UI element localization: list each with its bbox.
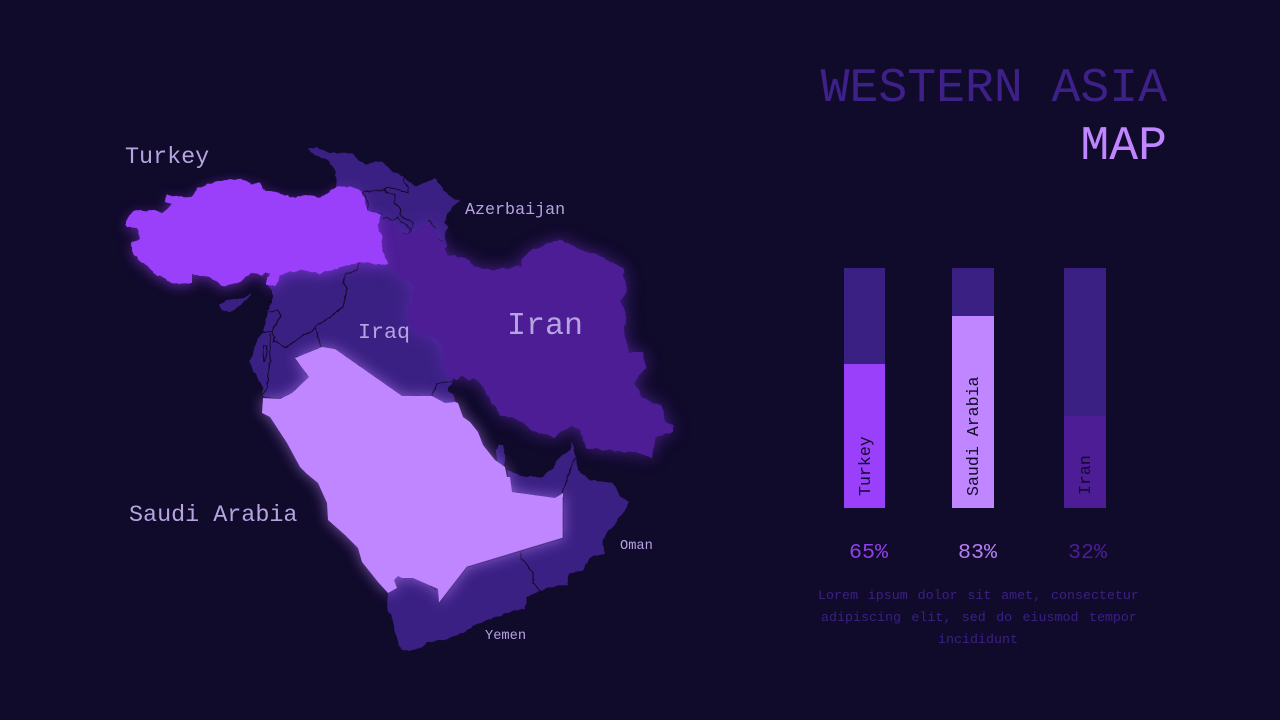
country: Georgia, Armenia, Azerbaijan <box>308 148 461 255</box>
value: Iran 32%: 32% <box>1068 540 1108 565</box>
title <box>821 62 1167 174</box>
body text <box>818 589 1139 648</box>
bar chart <box>844 268 1106 508</box>
title: WESTERN ASIA <box>821 62 1167 116</box>
bar: Saudi Arabia 83% <box>952 268 994 508</box>
body text: Lorem ipsum dolor sit amet, consectetur <box>818 589 1139 604</box>
label: Turkey: Turkey <box>125 145 209 171</box>
country: UAE and Qatar <box>496 440 576 498</box>
country: Turkey <box>127 179 388 286</box>
label: Azerbaijan: Azerbaijan <box>465 201 565 220</box>
bar: Turkey 65% <box>844 268 885 508</box>
country: Cyprus <box>219 293 252 312</box>
label: Iran: Iran <box>507 308 583 344</box>
country: Syria, Iraq, Jordan, Levant and Kuwait <box>250 250 456 405</box>
label: Iraq: Iraq <box>358 320 410 345</box>
bar: Turkey 65%: Turkey <box>856 436 875 496</box>
body text: incididunt <box>938 633 1018 648</box>
label: Yemen: Yemen <box>485 629 526 644</box>
body text: adipiscing elit, sed do eiusmod tempor <box>821 611 1137 626</box>
label: Oman: Oman <box>620 539 653 554</box>
title: MAP <box>1080 120 1167 174</box>
label: Saudi Arabia: Saudi Arabia <box>129 503 297 529</box>
bar: Iran 32% <box>1064 268 1106 508</box>
bar: Saudi Arabia 83%: Saudi Arabia <box>964 376 983 496</box>
map of Western Asia <box>125 145 673 651</box>
value: Turkey 65%: 65% <box>849 540 889 565</box>
value: Saudi Arabia 83%: 83% <box>958 540 998 565</box>
bar: Iran 32%: Iran <box>1076 455 1095 495</box>
country: Saudi Arabia <box>262 347 563 603</box>
neighbouring countries <box>219 148 629 651</box>
country: Oman <box>521 457 629 591</box>
country: Iran <box>377 218 673 458</box>
country: Yemen <box>387 545 540 651</box>
